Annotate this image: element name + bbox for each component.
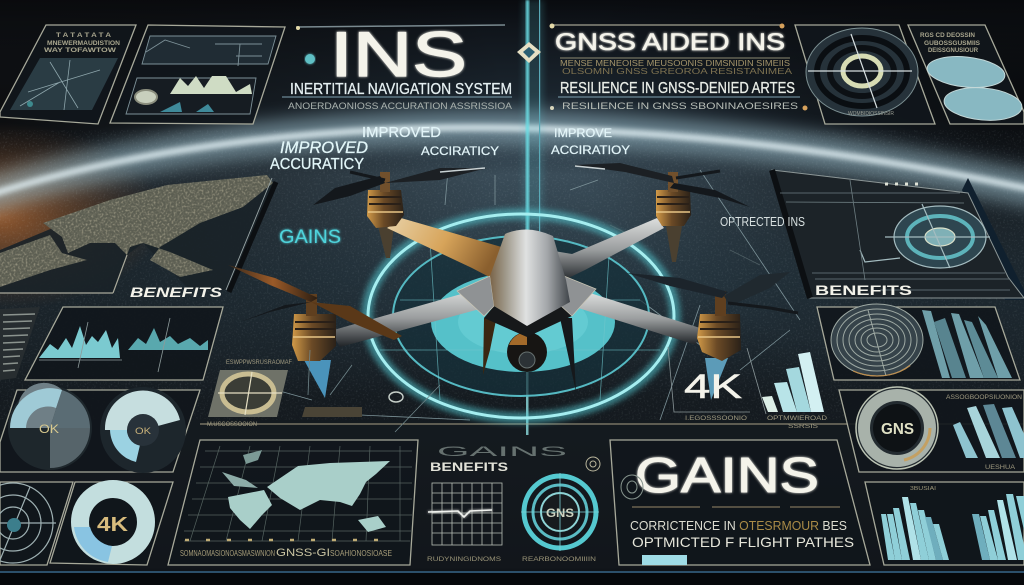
gains body text: CORRICTENCE IN OTESRMOUR BES [630,518,847,533]
map grid [184,446,412,541]
bar captions: UESHUA [985,465,1015,471]
tile captions: M.USCOSSOOION [207,422,257,428]
panel: top-left map tablet [0,25,136,124]
icon: diamond marker [517,42,541,63]
leg: front-left [378,226,394,258]
chart captions: SSRSIS [788,424,818,430]
panel: 4K ring [50,482,173,565]
garbled panel caption [44,33,120,54]
panel: world map chart [168,440,418,565]
chart: grid with signal [427,483,502,563]
motor: bottom-right [697,291,741,361]
small dial [135,90,157,104]
radar rings [0,483,56,563]
lobes caption: RGS CD DEOSSIN [920,33,975,39]
grid caption: RUDYNINGIDNOMS [427,556,502,563]
arm: top-left [387,218,505,280]
signal trace [428,510,492,517]
bar captions: ASSOGBOOPSIUONION [946,395,1022,401]
gauge: OK [8,383,92,470]
target label: GNS [546,506,574,520]
motor: top-left [367,172,404,228]
radar caption: WOMBIDIOSSINSIR [848,111,894,117]
text: improve accuracy right: ACCIRATIOY [551,143,630,157]
text: improved accuracy left: ACCURATICY [270,156,364,173]
small gold rule [632,506,840,508]
bar captions [946,395,1022,471]
INS header block [282,20,512,111]
chart caption: 3BUSIAI [910,486,937,492]
board rings [860,204,990,268]
small caption line: RESILIENCE IN GNSS SBONINAOESIRES [562,101,798,111]
gold caption band: MENSE MENEOISE MEUSOONIS DIMSNIDIN SIMEIIS [560,59,790,68]
panel: right radar board [772,170,1024,300]
gauge value: OK [39,422,59,436]
panel: top-right lobes [908,25,1024,124]
chart captions: I.EGOSSSOONIO [685,416,747,422]
cyan tab [642,555,687,565]
map: left earth landmass [0,170,280,293]
label: benefits left: BENEFITS [130,285,222,300]
blueprint lines around drone [200,170,1024,424]
drone [228,163,798,400]
gold caption band: OLSOMNI GNSS GREOROA RESISTANIMEA [562,67,793,76]
gauge ring [856,387,938,469]
motor: top-right [656,172,691,226]
text: improve accuracy right [551,126,630,157]
vertical light beam [517,0,544,435]
label: gains teal: GAINS [279,227,341,248]
slanted bars [953,404,1024,458]
chart: 4K label and rising bars [668,347,828,430]
gains body text: OPTMICTED F FLIGHT PATHES [632,534,854,550]
mini charts row [126,36,276,114]
axis ticks [185,539,390,541]
panel: bottom-right bar chart [865,482,1024,565]
subtitle: resilience: RESILIENCE IN GNSS-DENIED ARTES [560,80,795,97]
central body [490,229,570,326]
panel: waveform charts [25,307,223,380]
gauge label: GNS [881,421,914,438]
leg: rear-right with blue strut [705,358,728,400]
body shoulder plate [457,276,596,316]
panel: top-right radar [795,25,935,124]
ring value: 4K [97,514,129,536]
arm: bottom-right [575,293,700,345]
tile captions: ESWPPWSRUSRAOMAF [226,360,292,366]
garbled panel caption: MNEWERMAUDISTION [47,41,120,47]
orbit icon [621,475,643,499]
text: improve accuracy right: IMPROVE [554,126,612,140]
text: improved accuracy center: ACCIRATICY [421,144,499,158]
holographic target rings [367,214,675,418]
text: improved accuracy center [362,124,499,158]
chart captions [685,416,828,430]
panel: GNS gauge with bars [839,387,1024,472]
label: optimized INS: OPTRECTED INS [720,215,805,229]
chart axes [39,318,170,372]
text: improved accuracy center: IMPROVED [362,124,441,141]
arm: top-right [548,218,664,282]
icon tile: gold GNS dial [207,360,292,428]
heading: benefits centre: BENEFITS [430,460,508,474]
spiral [830,304,924,376]
board grid [780,180,1010,290]
landing leg: right [560,318,576,392]
propeller: top-right [574,163,750,207]
camera gimbal [507,332,547,372]
rising bars [762,352,824,412]
chart captions: OPTMWIEROAD [767,416,828,422]
title: GNSS aided INS: GNSS AIDED INS [555,29,785,56]
GNSS aided INS header block [550,24,808,111]
arm: bottom-left [330,289,487,347]
leg: front-right [666,226,682,262]
garbled panel caption: WAY TOFAWTOW [44,48,116,54]
text: improved accuracy left [270,138,368,173]
gold caption band [560,59,793,76]
panel: left text snippet [0,307,40,380]
panel: gains [610,440,870,565]
small caption line: ANOERDAONIOSS ACCURATION ASSRISSIOA [288,101,512,111]
label: benefits right: BENEFITS [815,283,912,298]
lobes caption: DEISSGNUSIOUR [928,48,979,54]
chart: teal peaks left [39,326,120,358]
chart: teal peaks right [128,328,208,350]
chart: 4K label and rising bars: 4K [684,368,742,406]
gains body text [630,518,854,550]
propeller: bottom-left [228,265,402,340]
garbled panel caption: T A T A T A T A [56,33,112,39]
body underside shadow [484,304,572,337]
horizon glow arc [0,128,1024,198]
ring gauge [80,489,146,555]
gauge value: OK [135,426,151,436]
panel: split gauges [0,383,200,473]
gains heading: GAINS [635,449,819,503]
propeller: bottom-right [627,272,798,313]
tile captions [207,360,292,428]
bars [881,494,1024,560]
radar rings [806,28,918,116]
leg: rear-left with blue strut [304,360,331,398]
motor: bottom-left [292,294,336,361]
panel: bottom-left radar [0,482,73,565]
board specks [885,182,925,186]
panel: world map chart: GNSS-GI [276,547,330,559]
faint heading: gains: GAINS [437,443,567,459]
title: INS: INS [330,20,467,90]
subtitle: inertial navigation system: INERTITIAL NAVIGATION SYSTEM [290,81,512,98]
slanted bars [922,310,1012,378]
map texture [10,58,118,110]
panel: spiral and bars [817,304,1020,380]
target caption: REARBONOOMIIIIN [522,557,596,563]
lobe shapes [926,53,1023,123]
panel: world map chart: SOAHIONOSIOASE [330,549,392,558]
small data strip beside tile [302,350,440,432]
small marks [586,457,600,471]
target: GNS ring [521,457,600,563]
highlight peaks [170,76,252,94]
landing leg: left [483,318,496,375]
lobes caption: GUBOSSGUSMIIS [924,41,980,47]
text: improved accuracy left: IMPROVED [280,138,368,157]
lobes caption [920,33,980,54]
gauge: second split [100,387,186,473]
propeller: top-left [313,168,487,205]
panel: top-left dashboard tablet [110,25,285,124]
map caption: SOMNAOMASIONOASMASWNION [180,549,275,558]
map land [222,450,390,532]
